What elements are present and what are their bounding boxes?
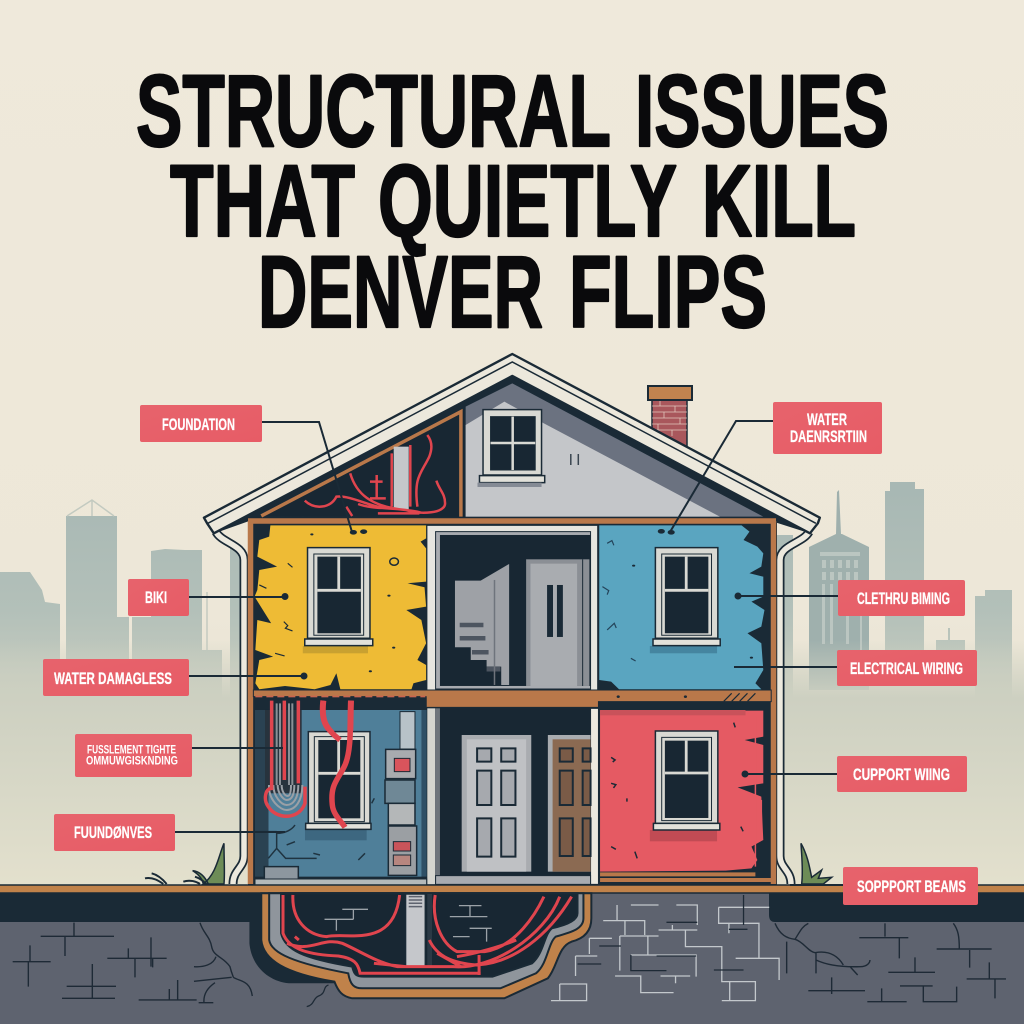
callout: foundnaves: FUUNDØNVES (74, 823, 152, 842)
title (136, 53, 889, 349)
lower floor panels (253, 690, 771, 885)
callout: clethru biming: CLETHRU BIMING (857, 589, 950, 608)
downspout gutters (216, 532, 809, 884)
callout: garbled two-line: FUSSLEMENT TIGHTE (87, 744, 176, 756)
soil cracks left (13, 923, 252, 1003)
icon: grass right (801, 843, 832, 884)
callout: water damage: WATER (807, 410, 847, 429)
title: KILL (702, 143, 856, 258)
roof soffit shadow (213, 373, 812, 534)
basement wires (283, 895, 572, 975)
callout: water damagless (43, 659, 189, 696)
roof and gable (204, 354, 820, 534)
callout: clethru biming (838, 580, 965, 616)
skyline: hazy Denver buildings (0, 482, 1024, 886)
callout: garbled two-line: OMMUWGISKNDING (86, 756, 178, 768)
panel: lower-left room with exposed wiring and electrical panels (253, 697, 427, 885)
callout: biki (128, 579, 189, 616)
title: STRUCTURAL (136, 53, 611, 168)
callout: garbled two-line (75, 734, 192, 777)
attic cutaway with wiring (261, 410, 464, 517)
callout: electrical wiring: ELECTRICAL WIRING (850, 659, 963, 678)
callout: foundnaves (54, 814, 175, 851)
brown door (548, 735, 591, 872)
panel: upper center room with stairs and door (427, 525, 598, 690)
basement foundation cutaway with tangled wiring (249, 893, 779, 1007)
electrical panels (385, 712, 417, 875)
chimney (648, 386, 692, 450)
callout: electrical wiring (837, 650, 977, 686)
callout: cupport wiing (837, 756, 967, 792)
wall cracks (255, 798, 374, 860)
panel: blue water-damaged room (599, 525, 764, 689)
upper floor panels (255, 525, 764, 690)
callout: foundation: FOUNDATION (162, 415, 235, 434)
callout: foundation (140, 405, 262, 442)
brick foundation lines (551, 905, 779, 1001)
soil cracks right (775, 923, 1006, 1002)
panel: red damaged room (600, 710, 771, 880)
callout: sopport beams: SOPPPORT BEAMS (857, 877, 966, 896)
white door (462, 735, 531, 872)
gable window (479, 410, 545, 483)
exposed wires (265, 701, 351, 816)
callout: biki: BIKI (145, 588, 167, 607)
title: ISSUES (635, 53, 889, 168)
ground and soil (0, 885, 1024, 1024)
basement support column (406, 894, 432, 967)
house walls (248, 518, 777, 886)
callout: water damage (773, 402, 882, 454)
panel: lower center room with doors (427, 708, 598, 885)
icon: grass left (145, 843, 224, 884)
callout: water damage: DAENRSRTIIN (790, 427, 867, 446)
panel: yellow water-damaged room (255, 525, 426, 689)
callout: water damagless: WATER DAMAGLESS (54, 669, 172, 688)
callout leaders (169, 421, 848, 885)
title: FLIPS (569, 234, 767, 349)
mid-floor beam (253, 690, 771, 707)
callout: cupport wiing: CUPPORT WIING (853, 765, 950, 784)
title: DENVER (258, 234, 543, 349)
callout: sopport beams (843, 867, 978, 905)
gable wall (466, 383, 763, 517)
title: QUIETLY (378, 143, 677, 258)
title: THAT (170, 143, 355, 258)
roof band (204, 354, 820, 533)
